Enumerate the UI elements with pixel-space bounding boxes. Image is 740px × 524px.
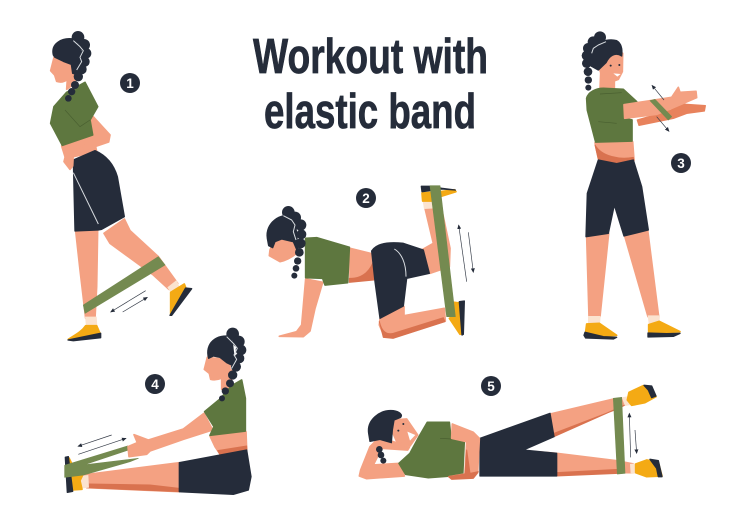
smile and eyes [610,64,621,77]
back shoe [171,284,186,314]
waist shadow [218,446,247,457]
shirt [306,238,349,285]
neck [222,370,232,389]
raised leg [422,206,450,273]
top shoe toe [644,385,656,398]
face [392,419,418,446]
shorts [73,151,124,231]
number badge 2 [356,188,376,208]
hair highlight [592,42,606,53]
shirt crease [440,437,452,440]
sock [80,475,89,489]
figure 5: side-lying leg raise [359,385,662,479]
arm and hand [128,413,213,457]
figure 1: standing leg curl [51,31,192,341]
hair [368,411,401,443]
front shoe sole [68,333,101,341]
number badge 4: 4 [151,377,159,392]
hair [588,40,622,70]
number badge 1: 1 [126,76,134,91]
motion arrows [459,225,473,282]
number badge 5 [481,376,501,396]
shoe sole [65,457,73,492]
braid [219,328,246,401]
resistance band [83,257,165,313]
bottom leg [524,451,633,475]
shorts seam [394,249,406,277]
front arm and hand [624,87,697,118]
left shoe [586,323,617,336]
shirt crease [65,110,90,127]
waist shadow [595,145,634,164]
shorts [480,413,557,476]
smile and eyes [397,423,415,441]
figure 2: kneeling leg raise [267,186,473,338]
number badge 3: 3 [677,156,685,171]
right shoe [649,321,680,333]
standing leg [76,229,98,318]
face [204,357,230,380]
number badge 5: 5 [487,379,495,394]
arm behind head [359,438,409,479]
raised shoe sole [421,186,455,192]
hair [267,215,298,253]
shorts [372,243,429,318]
face [269,235,297,262]
neck [600,73,614,90]
raised back leg [104,219,178,289]
shorts [179,450,251,494]
hair highlight [73,41,83,70]
face [597,50,623,81]
shorts seam [73,173,98,224]
figure 3: standing arm band pull [582,31,705,339]
kneeling leg shadow [379,318,445,338]
waist shadow [349,263,374,282]
hair [53,39,82,75]
waist [350,248,373,282]
shirt crease [598,93,622,123]
figure 4: seated band pull [65,328,251,494]
hair highlight [283,216,296,240]
bottom shoe toe [650,459,662,477]
resistance band [613,397,625,474]
title: elastic band [264,85,476,139]
left shoe sole [584,332,617,339]
left leg [587,233,609,317]
shirt [399,422,464,478]
shirt [51,82,98,145]
top shoe [627,386,656,405]
socks [622,396,636,474]
outstretched leg [83,463,179,492]
rear arm [637,104,705,125]
arm [279,279,323,337]
waist [210,432,247,457]
lower shoe sole [459,301,464,335]
shorts [586,160,648,237]
motion arrows [629,413,637,457]
hair highlight [227,337,237,368]
upper arm shadow [448,450,478,479]
number badge 2: 2 [362,191,370,206]
braid [582,31,606,91]
neck and face [51,55,76,89]
motion arrows [111,291,147,312]
leg shadow [87,484,179,492]
title: Workout with [253,30,488,84]
right shoe sole [648,333,680,337]
resistance band [650,99,672,120]
braid [65,31,91,102]
top leg [550,399,624,436]
bottom shoe [636,460,662,477]
motion arrows [652,85,669,131]
number badge 3 [671,153,691,173]
back shoe sole [170,288,192,315]
waist [62,135,97,157]
braid end [376,446,386,464]
raised sock [423,200,435,209]
kneeling leg [379,307,445,338]
motion arrows [78,435,126,454]
shirt [205,380,245,435]
upper arm [449,424,479,479]
lower shoe [449,302,462,334]
bottom leg shadow [557,469,618,476]
number badge 1 [120,73,140,93]
waist [595,142,634,163]
socks [85,280,179,326]
shoe [69,458,83,490]
front shoe [68,326,100,339]
resistance band [65,446,138,477]
socks [588,315,660,324]
right leg [625,230,659,317]
braid [282,206,306,279]
arm behind back [64,116,110,169]
title [253,30,488,139]
resistance band [430,186,455,317]
top leg shadow [554,405,625,437]
raised shoe [422,190,456,201]
hair [208,336,235,367]
number badge 4 [145,374,165,394]
shirt [587,88,637,142]
